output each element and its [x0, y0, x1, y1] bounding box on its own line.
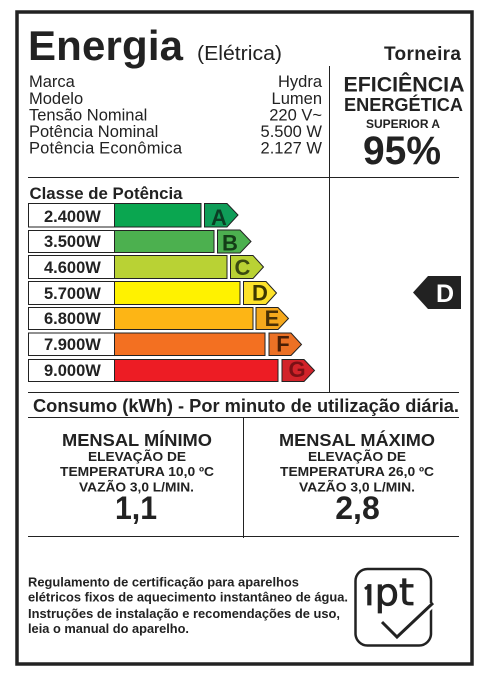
row E 6.800W: E — [265, 306, 279, 331]
icon: ipt certification logo: ıpt — [364, 571, 414, 614]
row B 3.500W: 3.500W — [44, 233, 101, 251]
row A 2.400W — [28, 204, 238, 230]
row B 3.500W — [28, 230, 251, 256]
icon: ipt certification logo — [356, 569, 433, 646]
class indicator arrow D: D — [436, 280, 454, 308]
panel: monthly maximum — [279, 429, 435, 526]
panel: product specifications: 220 V~ — [269, 106, 322, 124]
row D 5.700W: D — [252, 280, 268, 306]
panel: energy efficiency: 95% — [363, 129, 441, 173]
regulation note: leia o manual do aparelho. — [28, 621, 189, 636]
panel: product specifications: 5.500 W — [261, 123, 322, 141]
panel: monthly maximum: ELEVAÇÃO DE — [308, 449, 406, 464]
panel: energy efficiency: EFICIÊNCIA — [344, 72, 464, 96]
panel: monthly maximum: MENSAL MÁXIMO — [279, 429, 435, 450]
panel: energy efficiency: SUPERIOR A — [366, 119, 440, 131]
regulation note: Regulamento de certificação para aparelhos — [28, 574, 299, 590]
regulation note: elétricos fixos de aquecimento instantâneo de água. — [28, 590, 348, 604]
power class chart — [28, 204, 314, 382]
panel: monthly minimum: 1,1 — [115, 490, 157, 526]
row D 5.700W: 5.700W — [44, 285, 101, 303]
panel: product specifications: Potência Econômica — [29, 140, 183, 158]
class indicator arrow D — [413, 276, 461, 309]
panel: product specifications: Lumen — [272, 90, 322, 108]
panel: product specifications: Modelo — [29, 90, 83, 108]
panel: product specifications: Tensão Nominal — [29, 106, 147, 124]
product type: Torneira — [384, 44, 461, 65]
row B 3.500W: B — [222, 230, 238, 256]
regulation note: Instruções de instalação e recomendações de uso, — [28, 606, 340, 621]
panel: product specifications: Hydra — [278, 73, 323, 91]
power class heading: Classe de Potência — [30, 184, 183, 203]
panel: energy efficiency — [344, 72, 464, 173]
title: Energia — [28, 22, 184, 69]
row G 9.000W: G — [288, 357, 306, 382]
row C 4.600W: 4.600W — [44, 259, 101, 277]
row F 7.900W — [28, 332, 302, 356]
row E 6.800W — [28, 306, 288, 331]
panel: energy efficiency: ENERGÉTICA — [344, 94, 463, 115]
row F 7.900W: F — [276, 332, 290, 356]
row A 2.400W: 2.400W — [44, 208, 101, 226]
row C 4.600W: C — [235, 255, 251, 280]
row D 5.700W — [28, 280, 276, 306]
row G 9.000W — [28, 357, 314, 382]
panel: product specifications: Potência Nominal — [29, 123, 158, 141]
subtitle: (Elétrica) — [197, 43, 282, 65]
panel: monthly maximum: 2,8 — [335, 490, 380, 526]
panel: monthly minimum — [60, 429, 215, 526]
row G 9.000W: 9.000W — [44, 362, 101, 380]
panel: monthly minimum: TEMPERATURA 10,0 ºC — [60, 464, 215, 479]
panel: product specifications — [29, 73, 323, 158]
panel: monthly minimum: VAZÃO 3,0 L/MIN. — [79, 480, 194, 494]
panel: monthly minimum: MENSAL MÍNIMO — [62, 429, 212, 450]
panel: monthly maximum: TEMPERATURA 26,0 ºC — [280, 464, 435, 479]
panel: product specifications: 2.127 W — [261, 140, 322, 158]
panel: monthly minimum: ELEVAÇÃO DE — [88, 449, 186, 464]
row C 4.600W — [28, 255, 264, 280]
row F 7.900W: 7.900W — [44, 336, 101, 354]
row A 2.400W: A — [211, 205, 227, 230]
row E 6.800W: 6.800W — [44, 310, 101, 328]
panel: product specifications: Marca — [29, 73, 76, 91]
panel: monthly maximum: VAZÃO 3,0 L/MIN. — [299, 480, 415, 494]
regulation note — [28, 574, 348, 636]
consumption heading: Consumo (kWh) - Por minuto de utilização diária. — [33, 396, 459, 416]
